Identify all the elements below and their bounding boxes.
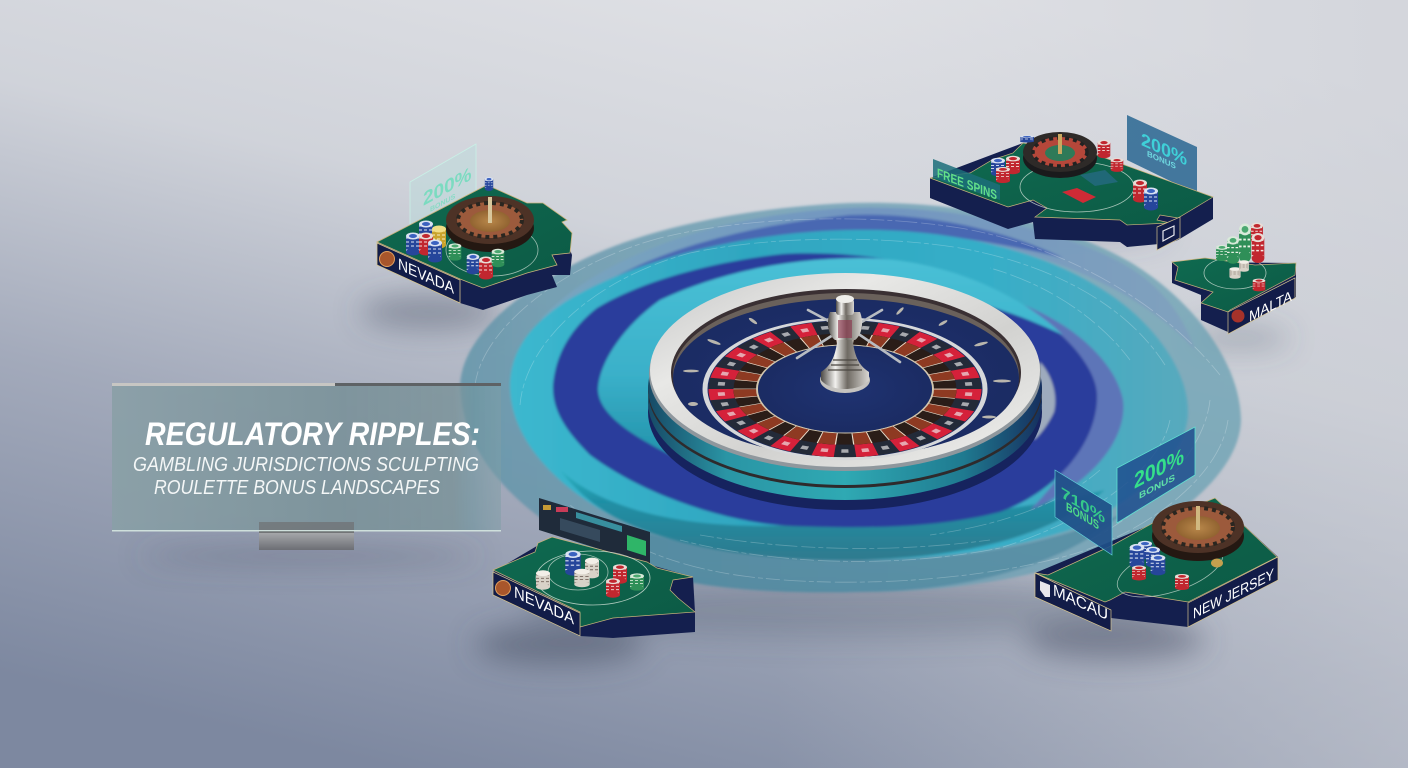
chips: [1130, 541, 1223, 590]
200% screen: BONUS: [1139, 472, 1176, 502]
label: [493, 572, 580, 636]
Macau label: [1035, 573, 1111, 631]
plate: Malta: [1172, 223, 1296, 334]
200% screen: 200%: [1134, 443, 1184, 494]
main cyan ring: [510, 230, 1188, 560]
subtitle text: GAMBLING JURISDICTIONS SCULPTING: [133, 453, 479, 476]
ripple rings: [460, 203, 1241, 592]
icon badge: [1157, 217, 1180, 250]
plate: Nevada bottom: [493, 498, 695, 638]
Macau label: MACAU: [1053, 581, 1108, 624]
pale gap right of wheel: [1034, 362, 1055, 440]
bonus glass panel: BONUS: [430, 192, 455, 214]
free spins sign: [933, 159, 1000, 203]
bonus glass panel: 200%: [423, 163, 472, 211]
wheel: [1152, 501, 1244, 561]
turret: [797, 295, 900, 393]
title panel: [112, 383, 501, 550]
200% screen: [1117, 427, 1195, 523]
label: NEVADA: [398, 255, 455, 298]
title text: REGULATORY RIPPLES:: [145, 416, 480, 452]
subtitle text: [133, 453, 479, 499]
wheel: [1023, 132, 1097, 178]
710% bonus screen: [1055, 470, 1112, 555]
200% screen: [1127, 115, 1197, 194]
plate: Macau and New Jersey: [1035, 427, 1278, 631]
lower teal ring: [560, 470, 1105, 560]
blue top streak: [560, 215, 1063, 322]
label: MALTA: [1249, 288, 1292, 326]
bonus glass panel: [410, 144, 476, 233]
chips: [406, 177, 504, 280]
710% bonus screen: 710%: [1061, 484, 1106, 527]
710% bonus screen: BONUS: [1066, 499, 1099, 533]
number ring and pockets: [705, 319, 985, 459]
subtitle text: ROULETTE BONUS LANDSCAPES: [154, 476, 440, 499]
plate: Nevada top left: [377, 144, 572, 310]
label: NEVADA: [514, 583, 575, 629]
label: [377, 243, 460, 303]
200% screen: BONUS: [1147, 148, 1176, 171]
chips: [536, 550, 644, 598]
wheel: [446, 196, 534, 252]
data streaks: [475, 219, 1228, 582]
free spins sign: FREE SPINS: [937, 165, 997, 203]
chips: [1216, 223, 1265, 291]
200% screen: 200%: [1141, 130, 1187, 171]
data screen: [539, 498, 650, 565]
chips: [991, 136, 1158, 210]
New Jersey label: NEW JERSEY: [1193, 566, 1274, 623]
violet right ring: [1010, 300, 1123, 510]
outer translucent ring: [460, 203, 1241, 592]
bowl markers: [683, 306, 1011, 418]
dark blue ring: [553, 253, 1097, 527]
inner cyan ring: [598, 258, 1063, 470]
slate blue upper band: [540, 208, 1195, 350]
plate: Free Spins: [930, 115, 1213, 250]
lower translucent band: [610, 515, 1120, 592]
ground shadows: [140, 218, 1290, 665]
central roulette wheel: [648, 273, 1042, 510]
